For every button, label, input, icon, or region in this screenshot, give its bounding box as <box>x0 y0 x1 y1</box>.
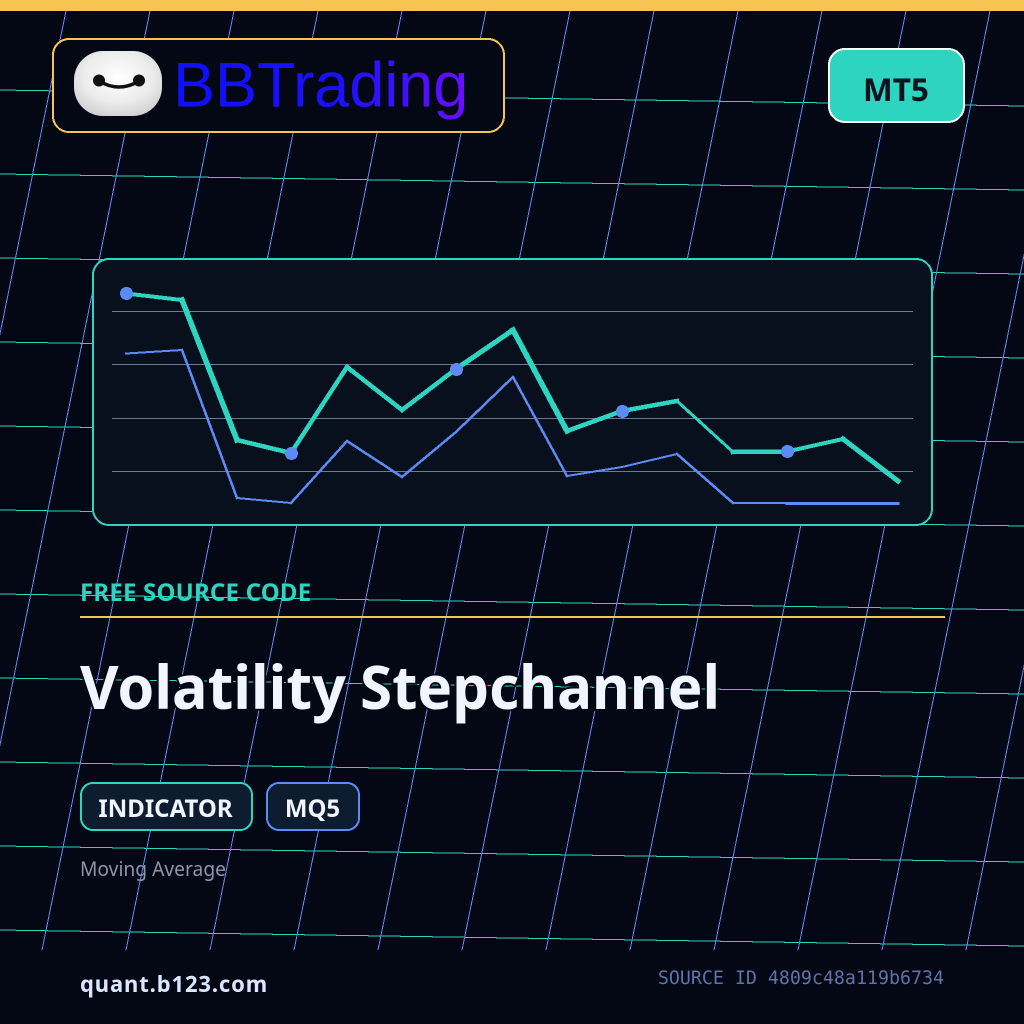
title: Stepchannel <box>360 645 720 727</box>
footer site url: quant.b123.com <box>80 969 268 999</box>
platform badge <box>829 49 964 122</box>
chart panel <box>93 259 932 525</box>
tag: indicator <box>81 783 252 830</box>
eyebrow label: FREE SOURCE CODE <box>80 576 311 609</box>
chart markers <box>120 287 794 460</box>
tag: mq5: MQ5 <box>285 792 340 825</box>
title <box>80 645 720 727</box>
teal price line <box>126 294 898 481</box>
top accent bar <box>0 0 1024 11</box>
footer source id: SOURCE ID 4809c48a119b6734 <box>658 968 944 989</box>
subtitle: Moving Average <box>80 855 226 882</box>
brand name: BBTrading <box>173 50 468 120</box>
platform badge: MT5 <box>863 68 929 111</box>
logo panel <box>53 39 504 132</box>
tag: mq5 <box>267 783 359 830</box>
blue channel line <box>126 350 898 504</box>
title: Volatility <box>80 645 347 727</box>
tag: indicator: INDICATOR <box>98 792 233 825</box>
divider <box>80 616 945 618</box>
icon: robot face <box>74 51 162 116</box>
